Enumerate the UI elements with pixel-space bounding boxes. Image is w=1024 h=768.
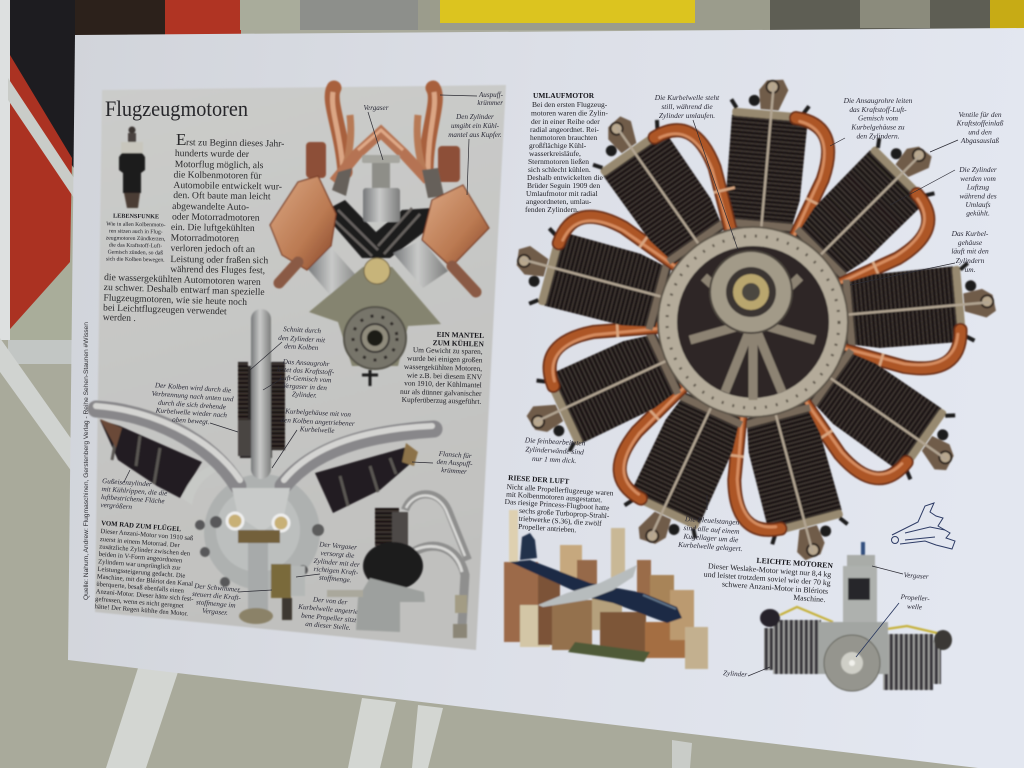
text block: Riese der Luft: triebwerke (S.36), die zwölf	[518, 514, 602, 528]
engine labels: Anzani: Schnitt durch	[283, 325, 322, 335]
engine labels: Anzani: vergrößern	[100, 501, 133, 511]
intro text: während des Fluges fest,	[170, 264, 265, 276]
text block: Vom Rad zum Flügel: überquerte, besaß ebenfalls einen	[96, 581, 185, 595]
intro text: rst zu Beginn dieses Jahr-	[186, 137, 284, 150]
radial engine	[504, 75, 1001, 574]
engine labels: Weslake: Vergaser	[903, 571, 929, 581]
engine labels: Anzani: an dieser Stelle.	[305, 620, 351, 632]
icon: crankshaft sketch	[892, 503, 955, 549]
text block: Vom Rad zum Flügel: Maschine, mit der Blériot den Kanal	[97, 573, 193, 588]
text block: Vom Rad zum Flügel: zuerst in einem Motorrad. Der	[100, 536, 181, 549]
text block: Umlaufmotor: UMLAUFMOTOR	[533, 91, 595, 100]
engine labels: radial: während des	[959, 192, 997, 200]
engine label: Kühlmantel	[448, 113, 502, 195]
credit line: Quelle: Nahum, Andrew: Flugmaschinen, Gerstenberg Verlag - Reihe Sehen-Staunen #Wissen	[83, 322, 90, 600]
engine labels: Anzani: stoffmenge im	[196, 598, 236, 610]
left cylinder	[100, 420, 202, 498]
text block: Vom Rad zum Flügel: gefressen, wenn es nicht geregnet	[95, 596, 184, 610]
engine labels: radial: um.	[965, 265, 976, 274]
intro text: bei Leichtflugzeugen verwendet	[103, 302, 227, 317]
engine labels: Anzani: Kurbelwelle angetrie-	[297, 603, 362, 616]
engine labels: Anzani: Gußeisenzylinder	[102, 477, 152, 488]
engine labels: radial: Kraftstoffeinlaß	[956, 118, 1004, 128]
spouts	[452, 266, 476, 292]
engine labels: radial: Zylinder umlaufen.	[659, 111, 715, 120]
engine labels: Anzani: Der von der	[312, 595, 348, 607]
engine labels: Anzani: Verbrennung nach unten und	[151, 390, 234, 403]
engine label: Auspuffkrümmer: krümmer	[477, 99, 503, 107]
engine labels: Anzani: krümmer	[441, 466, 467, 476]
plugs	[760, 609, 780, 627]
engine labels: radial: Kurbelwelle gelagert.	[677, 540, 743, 553]
text block: Vom Rad zum Flügel: Anzani-Motor. Dieser hätte sich fest-	[95, 588, 194, 603]
engine: Anzani	[96, 309, 434, 624]
engine: small single-cylinder unit	[327, 494, 468, 638]
text block: Umlaufmotor: sich schlecht kühlen.	[528, 165, 591, 174]
intro text: Leistung oder fraßen sich	[170, 254, 268, 266]
copper heads	[306, 142, 326, 178]
engine labels: Anzani: Zylinder mit der	[313, 557, 360, 569]
engine labels: Anzani: steuert die Kraft-	[192, 590, 242, 602]
silver cylinders	[307, 246, 362, 302]
engine labels: Anzani	[100, 325, 474, 633]
engine labels: Anzani: Kurbelwelle wieder nach	[155, 406, 228, 419]
engine labels: radial: Zylindern	[956, 256, 985, 265]
engine labels: Anzani: Der Vergaser	[318, 540, 358, 552]
text block: Umlaufmotor: Brüder Seguin 1909 den	[527, 181, 600, 190]
left cylinder	[764, 628, 776, 670]
engine labels: radial: Gemisch vom	[858, 114, 899, 122]
engine labels: radial: nur 1 mm dick.	[532, 454, 577, 465]
engine labels: radial: Das Kurbel-	[951, 229, 989, 238]
top carburettor tower	[861, 542, 865, 556]
text block: Umlaufmotor: Umlaufmotor mit radial	[526, 189, 598, 198]
text block: Umlaufmotor: henmotoren brauchten	[530, 133, 598, 142]
caption: Lebensfunke: LEBENSFUNKE	[113, 213, 159, 220]
text block: Vom Rad zum Flügel: VOM RAD ZUM FLÜGEL	[101, 520, 182, 533]
exhaust pipes	[332, 88, 345, 172]
caption: Lebensfunke: Gemisch zünden, so daß	[108, 249, 163, 256]
engine labels: Anzani: Vergaser in den	[283, 382, 328, 392]
text block: Riese der Luft: sechs große Turboprop-Strahl-	[519, 506, 610, 520]
caption: Lebensfunke: sich die Kolben bewegen.	[106, 256, 165, 264]
text block: Leichte Motoren: LEICHTE MOTOREN	[756, 556, 834, 570]
engine labels: radial: Zylinderwände sind	[525, 444, 584, 457]
intro text: den. Oft baute man leicht	[173, 190, 271, 202]
text block: Umlaufmotor: der in einer Reihe oder	[531, 117, 600, 126]
text block: Leichte Motoren: und leistet trotzdem soviel wie der 70 kg	[704, 570, 831, 587]
engine labels: Anzani: den Auspuff-	[436, 458, 473, 468]
text block: Ein Mantel zum Kühlen: Um Gewicht zu sparen,	[413, 345, 483, 356]
text block: Vom Rad zum Flügel: Zylindern war ursprünglich zur	[98, 558, 181, 572]
right cylinder	[315, 447, 410, 513]
engine labels: radial: Abgasauslaß	[960, 136, 999, 145]
engine labels: Anzani: Kurbelwelle	[299, 425, 335, 435]
right cylinder	[883, 634, 933, 690]
engine labels: radial: werden vom	[960, 174, 996, 183]
engine labels: Anzani: leitet das Kraftstoff-	[277, 366, 335, 377]
engine labels: radial: Die Kurbelwelle steht	[654, 93, 720, 102]
engine labels: radial: Umlaufs	[965, 200, 991, 209]
exhaust pipes	[96, 409, 238, 486]
text block: Ein Mantel zum Kühlen: wassergekühlten Motoren,	[404, 362, 482, 373]
text block: Umlaufmotor: angeordneten, umlau-	[526, 197, 592, 206]
engine labels: Anzani: Vergaser.	[202, 607, 229, 617]
intro text: Motorradmotoren	[171, 232, 239, 244]
caption: Lebensfunke: ren sitzen auch in Flug-	[109, 229, 163, 235]
text block: Ein Mantel zum Kühlen: wurde bei einigen großen	[407, 353, 483, 364]
engine labels: Anzani: richtigen Kraft-	[313, 565, 359, 577]
text block: Ein Mantel zum Kühlen: Kupferüberzug ausgeführt.	[402, 395, 482, 406]
plane	[510, 533, 682, 623]
text block: Ein Mantel zum Kühlen: EIN MANTEL	[437, 330, 484, 340]
engine label: Vergaser: Vergaser	[364, 104, 389, 112]
engine labels: radial: Ventile für den	[958, 110, 1002, 119]
engine labels: radial: Die Zylinder	[958, 165, 997, 174]
illustration: flying boat over city	[504, 510, 708, 669]
engine labels: Anzani: den Kolben angetriebener	[280, 416, 355, 428]
copper jackets	[270, 176, 336, 270]
engine labels: Anzani: oben bewegt.	[172, 416, 210, 426]
engine labels: radial: gehäuse	[958, 238, 983, 247]
text block: Ein Mantel zum Kühlen: nur als dünner galvanischer	[400, 387, 482, 398]
text block: Umlaufmotor: radial angeordnet. Rei-	[530, 125, 599, 134]
engine labels: radial: und den	[968, 128, 992, 136]
text block: Umlaufmotor: fenden Zylindern.	[525, 205, 579, 214]
wiring	[780, 607, 937, 633]
engine labels: Anzani: durch die sich drehende	[158, 399, 226, 411]
crankcase	[309, 267, 441, 366]
text block: Riese der Luft: Nicht alle Propellerflugzeuge waren	[506, 482, 614, 498]
intake manifold	[334, 132, 428, 182]
title: Flugzeugmotoren	[105, 96, 248, 121]
engine labels: Anzani: luftbestrichene Fläche	[101, 493, 165, 505]
engine labels: Anzani: stoffmenge.	[319, 573, 352, 584]
engine labels: Weslake: Propeller-	[899, 593, 931, 603]
engine labels: Anzani: Das Ansaugrohr	[282, 358, 330, 368]
city skyline	[504, 510, 708, 669]
engine labels: radial: läuft mit den	[951, 246, 989, 256]
engine labels: radial	[523, 93, 1004, 553]
intro text: verloren jedoch oft an	[170, 243, 255, 255]
intro text: hunderts wurde der	[175, 148, 250, 160]
engine labels: Anzani: Der Kolben wird durch die	[154, 381, 231, 395]
engine labels: radial: Die Ansaugrohre leiten	[843, 96, 913, 105]
engine labels: radial: Kugellager um die	[682, 531, 739, 544]
caption: Lebensfunke: zeugmotoren Zündkerzen,	[106, 235, 166, 243]
page background	[95, 85, 506, 650]
engine labels: Anzani: Zylinder.	[292, 390, 317, 400]
engine labels: radial: Kurbelgehäuse zu	[850, 122, 905, 132]
text block: Riese der Luft: Propeller antrieben.	[518, 522, 577, 534]
intro text: ein. Die luftgekühlten	[171, 222, 255, 234]
text block: Ein Mantel zum Kühlen: von 1910, der Kühlmantel	[404, 378, 482, 389]
crankcase hub	[658, 227, 848, 417]
text block: Riese der Luft: mit Kolbenmotoren ausgestattet.	[506, 489, 603, 504]
crankcase	[818, 622, 888, 674]
intro text: zu schwer. Deshalb entwarf man spezielle	[104, 282, 265, 298]
intro text: die Kolbenmotoren für	[174, 169, 262, 182]
nine rotary cylinders	[504, 75, 1001, 574]
engine label: Kühlmantel: Den Zylinder	[455, 113, 494, 121]
text block: Umlaufmotor: wasserkreisläufe,	[529, 149, 581, 158]
engine labels: radial: Die feinbearbeiteten	[524, 435, 586, 448]
engine labels: Anzani: Luft-Gemisch vom	[278, 374, 332, 384]
text block: Ein Mantel zum Kühlen: ZUM KÜHLEN	[433, 338, 485, 349]
engine label: Auspuffkrümmer: Auspuff-	[478, 91, 504, 99]
top cylinder	[240, 366, 272, 458]
engine labels: Anzani: versorgt die	[320, 549, 355, 560]
engine labels: Anzani: dem Kolben	[284, 342, 319, 352]
engine labels: Anzani: Flansch für	[437, 450, 472, 460]
intro text: Automobile entwickelt wur-	[173, 180, 282, 192]
intro text: Motorflug möglich, als	[175, 159, 264, 171]
crankcase	[204, 474, 320, 590]
intro text: oder Motorradmotoren	[172, 211, 260, 224]
text block: Umlaufmotor: Deshalb entwickelten die	[527, 173, 603, 182]
text block: Vom Rad zum Flügel: beiden in V-Form angeordneten	[98, 551, 183, 565]
engine label: Kühlmantel: umgibt ein Kühl-	[451, 122, 500, 130]
text block: Umlaufmotor: motoren waren die Zylin-	[531, 108, 608, 118]
engine: Weslake flat twin	[760, 542, 952, 691]
engine labels: radial: das Kraftstoff-Luft-	[849, 105, 907, 114]
engine labels: Weslake: welle	[907, 602, 922, 611]
engine labels: Anzani: bene Propeller sitzt	[301, 612, 358, 624]
manifold	[232, 488, 290, 532]
text block: Umlaufmotor: Bei den ersten Flugzeug-	[532, 100, 608, 109]
text block: Riese der Luft: Das riesige Princess-Flugboot hatte	[504, 497, 610, 512]
engine labels: Anzani: Kurbelgehäuse mit von	[284, 407, 352, 419]
engine label: Auspuffkrümmer	[440, 91, 504, 107]
engine: water-cooled V engine	[270, 88, 489, 386]
text block: Leichte Motoren: Dieser Weslake-Motor wiegt nur 8,4 kg	[708, 561, 832, 579]
engine labels: Anzani: den Zylinder mit	[278, 334, 326, 344]
intake stem	[248, 543, 268, 611]
text block: Vom Rad zum Flügel: Dieser Anzani-Motor von 1910 saß	[100, 528, 194, 542]
caption: Lebensfunke: die das Kraftstoff-Luft-	[109, 242, 162, 249]
intro text	[103, 130, 284, 328]
text block: Riese der Luft: RIESE DER LUFT	[508, 473, 570, 486]
text block: Leichte Motoren: schwere Anzani-Motor in Blériots	[722, 579, 828, 596]
intro text: Flugzeugmotoren, wie sie heute noch	[103, 292, 247, 308]
intro text: abgewandelte Auto-	[172, 201, 249, 213]
carburettor	[372, 160, 390, 190]
text block: Vom Rad zum Flügel: hätte! Der Regen kühlte den Motor.	[94, 603, 189, 618]
engine label: Vergaser	[364, 104, 389, 160]
engine labels: Anzani: mit Kühlrippen, die die	[101, 485, 168, 498]
text block: Vom Rad zum Flügel: Leistungssteigerung gedacht. Die	[97, 566, 186, 580]
caption: Lebensfunke: Wie in allen Kolbenmoto-	[106, 221, 166, 229]
panel: right page	[503, 75, 1004, 691]
engine labels: radial: den Zylindern.	[856, 132, 900, 140]
icon: spark plug	[119, 126, 145, 208]
engine labels: radial: Luftzug	[966, 182, 989, 192]
text block: Leichte Motoren: Maschine.	[793, 593, 826, 604]
text block: Vom Rad zum Flügel: zusätzliche Zylinder zwischen den	[99, 543, 191, 558]
intro text: werden .	[103, 312, 136, 324]
dark V fins	[322, 200, 440, 258]
text block: Ein Mantel zum Kühlen: wie z.B. bei diesem ENV	[407, 370, 483, 381]
engine labels: radial: sind alle auf einem	[683, 523, 740, 536]
text block: Umlaufmotor: Sternmotoren ließen	[528, 157, 589, 166]
text block: Umlaufmotor: großflächige Kühl-	[529, 141, 587, 150]
engine labels: Weslake	[723, 566, 931, 679]
engine labels: Weslake: Zylinder	[723, 669, 748, 679]
engine labels: radial: Die Pleuelstangen	[684, 514, 740, 527]
engine label: Kühlmantel: mantel aus Kupfer.	[448, 131, 502, 139]
intro text: die wassergekühlten Automotoren waren	[104, 272, 261, 288]
engine labels: radial: still, während die	[661, 102, 713, 111]
engine labels: Anzani: Der Schwimmer	[193, 582, 241, 594]
intro text: E	[176, 130, 186, 149]
engine labels: radial: gekühlt.	[966, 208, 990, 218]
float chamber	[271, 564, 291, 598]
panel: left page	[83, 85, 506, 650]
